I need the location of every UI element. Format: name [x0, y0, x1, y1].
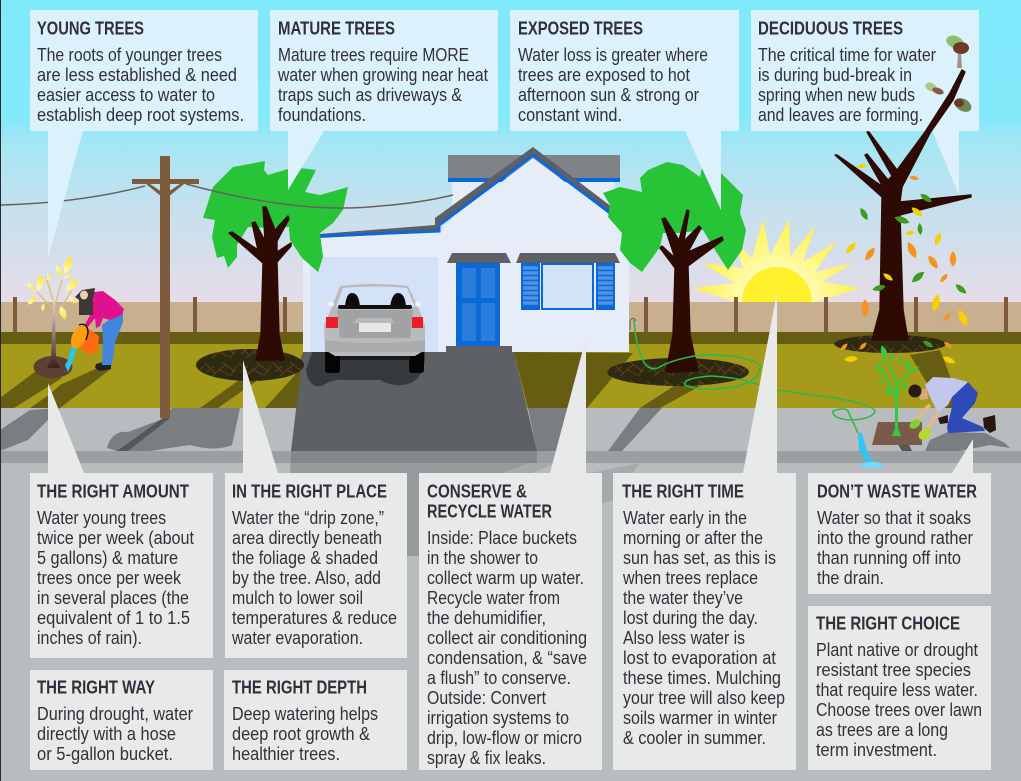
text: the right amount: Water young trees [37, 507, 166, 528]
panel: the right time [613, 473, 796, 770]
panel: young trees [30, 10, 258, 131]
driveway [291, 352, 537, 463]
mulch rings [196, 335, 946, 386]
text: conserve and recycle water: Recycle water from [427, 587, 560, 608]
pointer: young trees [48, 131, 83, 258]
heading: conserve and recycle water: CONSERVE & [427, 480, 527, 502]
text: in the right place: area directly beneath [232, 527, 382, 548]
text: exposed trees: trees are exposed to hot [518, 64, 690, 85]
text: young trees: are less established & need [37, 64, 237, 85]
text: the right time: & cooler in summer. [623, 727, 766, 748]
text: mature trees [277, 44, 488, 125]
text: in the right place: by the tree. Also, add [232, 567, 381, 588]
text: the right time: soils warmer in winter [623, 707, 777, 728]
text: the right choice: term investment. [816, 739, 937, 760]
trunk and branches [835, 70, 971, 340]
text: the right time [622, 507, 785, 748]
text: mature trees: Mature trees require MORE [278, 44, 469, 65]
trunk and branches [660, 210, 723, 372]
car shadow [306, 352, 425, 386]
text: conserve and recycle water: collect warm up water. [427, 567, 584, 588]
fence wall [0, 302, 1021, 332]
text: the right amount: equivalent of 1 to 1.5 [37, 607, 190, 628]
text: conserve and recycle water: drip, low-flow or micro [427, 727, 582, 748]
panel: the right way [30, 670, 213, 770]
utility pole [132, 156, 199, 418]
sapling being planted [872, 344, 922, 445]
text: the right amount: in several places (the [37, 587, 189, 608]
heading: the right way: THE RIGHT WAY [37, 676, 156, 698]
text: don't waste water [817, 507, 973, 588]
text: the right time: when trees replace [622, 567, 758, 588]
heading: the right choice: THE RIGHT CHOICE [816, 612, 960, 634]
text: mature trees: traps such as driveways & [278, 84, 462, 105]
text: the right time: these times. Mulching [623, 667, 781, 688]
text: the right time: Also less water is [623, 627, 745, 648]
text: deciduous trees: The critical time for water [758, 44, 936, 65]
text: conserve and recycle water: in the shower to [427, 547, 538, 568]
falling leaves [839, 163, 970, 365]
text: don't waste water: into the ground rather [817, 527, 973, 548]
kneeling man [908, 377, 996, 442]
heading: the right time: THE RIGHT TIME [622, 480, 744, 502]
text: exposed trees: constant wind. [518, 104, 622, 125]
text: conserve and recycle water: condensation, & “save [427, 647, 587, 668]
text: young trees: The roots of younger trees [37, 44, 222, 65]
text: the right depth [232, 703, 378, 764]
text: the right time: your tree will also keep [623, 687, 785, 708]
spigot [630, 318, 636, 330]
young tree [26, 255, 80, 378]
text: the right time: lost during the day. [623, 607, 758, 628]
text: conserve and recycle water [427, 527, 587, 768]
pointer: conserve and recycle [550, 338, 586, 473]
water runoff [858, 433, 884, 468]
text: deciduous trees: spring when new buds [758, 84, 915, 105]
text: the right choice: Choose trees over lawn [816, 699, 982, 720]
heading: young trees: YOUNG TREES [37, 18, 144, 38]
heading: don't waste water: DON’T WASTE WATER [817, 480, 977, 502]
heading: conserve and recycle water [427, 480, 552, 522]
text: the right choice: resistant tree species [816, 659, 971, 680]
text: exposed trees: Water loss is greater where [518, 44, 708, 65]
house [303, 147, 636, 353]
text: the right time: lost to evaporation at [623, 647, 776, 668]
mature tree [203, 161, 348, 360]
text: conserve and recycle water: Inside: Place buckets [427, 527, 577, 548]
utility wires [1, 184, 453, 208]
pointer: in the right place [243, 360, 278, 473]
awnings [447, 253, 620, 263]
text: the right depth: deep root growth & [232, 723, 370, 744]
text: conserve and recycle water: irrigation systems to [427, 707, 569, 728]
heading: deciduous trees: DECIDUOUS TREES [758, 18, 903, 38]
garage opening [310, 257, 438, 352]
trunk and branches [229, 207, 291, 360]
text: the right amount: 5 gallons) & mature [37, 547, 178, 568]
text: conserve and recycle water: Outside: Convert [427, 687, 546, 708]
panel: in the right place [225, 473, 407, 658]
sky background [0, 0, 1021, 320]
text: young trees: easier access to water to [37, 84, 215, 105]
garden hose [634, 320, 875, 433]
text: the right choice: as trees are a long [816, 719, 948, 740]
pointer: exposed trees [685, 131, 721, 210]
heading: exposed trees: EXPOSED TREES [518, 18, 643, 38]
front step [446, 346, 512, 353]
text: conserve and recycle water: spray & fix leaks. [427, 747, 546, 768]
fence posts [13, 297, 1008, 335]
text: conserve and recycle water: a flush” to conserve. [427, 667, 571, 688]
car [306, 284, 425, 386]
pointer: mature trees [288, 131, 324, 190]
text: deciduous trees: and leaves are forming. [758, 104, 923, 125]
buds [924, 33, 974, 115]
text: don't waste water: than running off into [817, 547, 961, 568]
text: the right amount: twice per week (about [37, 527, 194, 548]
text: don't waste water: the drain. [817, 567, 884, 588]
text: conserve and recycle water: the dehumidifier, [427, 607, 546, 628]
text: the right way: directly with a hose [37, 723, 176, 744]
text: mature trees: foundations. [278, 104, 366, 125]
text: the right time: sun has set, as this is [623, 547, 776, 568]
text: in the right place: water evaporation. [231, 627, 363, 648]
text: the right way [37, 703, 193, 764]
heading: the right depth: THE RIGHT DEPTH [232, 676, 367, 698]
text: in the right place [231, 507, 397, 648]
text: the right time: the water they’ve [623, 587, 743, 608]
panel: mature trees [270, 10, 498, 131]
text: the right choice: Plant native or drought [816, 639, 978, 660]
panel: don't waste water [808, 473, 991, 594]
deciduous tree [835, 33, 974, 365]
woman watering with bucket [65, 288, 124, 372]
sidewalk and curb [0, 408, 1021, 781]
heading: mature trees: MATURE TREES [278, 18, 395, 38]
pointer: deciduous trees [932, 131, 959, 195]
panel: the right depth [224, 670, 407, 770]
text: the right amount: inches of rain). [37, 627, 142, 648]
text: the right choice: that require less water. [816, 679, 978, 700]
text: exposed trees: afternoon sun & strong or [518, 84, 699, 105]
text: the right amount: trees once per week [37, 567, 182, 588]
panel: deciduous trees [751, 10, 979, 131]
text: exposed trees [518, 44, 708, 125]
text: mature trees: water when growing near heat [277, 64, 488, 85]
pointer: don't waste water [952, 439, 973, 473]
lawn [0, 332, 1021, 408]
heading: the right amount: THE RIGHT AMOUNT [37, 480, 190, 502]
window with shutters [521, 263, 615, 310]
text: the right way: or 5-gallon bucket. [37, 743, 173, 764]
front door [456, 263, 500, 347]
text: young trees [37, 44, 244, 125]
pointer: the right amount [48, 383, 84, 473]
heading: in the right place: IN THE RIGHT PLACE [232, 480, 387, 502]
text: the right time: Water early in the [623, 507, 747, 528]
panel: exposed trees [510, 10, 739, 131]
upper rear roof [448, 155, 620, 178]
text: the right way: During drought, water [37, 703, 193, 724]
roof edge [319, 147, 612, 238]
text: the right time: morning or after the [623, 527, 763, 548]
text: the right depth: healthier trees. [232, 743, 340, 764]
text: young trees: establish deep root systems. [37, 104, 244, 125]
foliage [203, 161, 348, 272]
text: don't waste water: Water so that it soaks [817, 507, 971, 528]
house body [303, 158, 629, 352]
heading: conserve and recycle water: RECYCLE WATER [427, 500, 552, 522]
text: deciduous trees [758, 44, 936, 125]
text: the right amount [37, 507, 194, 648]
pointer: the right time [743, 292, 777, 473]
text: in the right place: mulch to lower soil [232, 587, 363, 608]
text: in the right place: the foliage & shaded [232, 547, 378, 568]
foliage [603, 162, 746, 272]
panel: the right amount [30, 473, 213, 658]
text: the right depth: Deep watering helps [232, 703, 378, 724]
exposed tree [603, 162, 746, 372]
shadows on lawn and sidewalk [0, 350, 1010, 451]
text: the right choice [816, 639, 982, 760]
text: in the right place: Water the “drip zone,” [232, 507, 384, 528]
text: deciduous trees: is during bud-break in [758, 64, 912, 85]
sun [693, 219, 860, 337]
text: conserve and recycle water: collect air conditioning [427, 627, 587, 648]
panel: conserve and recycle water [419, 473, 602, 770]
panel: the right choice [808, 606, 991, 770]
text: in the right place: temperatures & reduce [232, 607, 397, 628]
